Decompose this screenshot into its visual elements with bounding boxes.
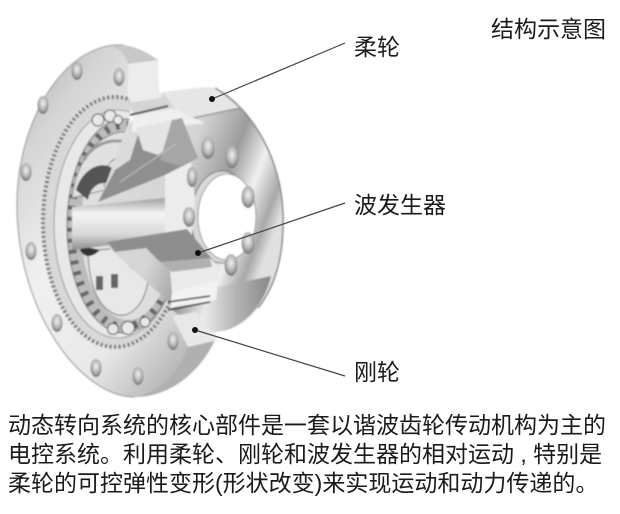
diagram: harmonic drive cutaway	[16, 42, 346, 398]
upper section: wave generator and flexspline	[98, 97, 205, 202]
leader: wave generator	[195, 203, 345, 256]
toothed ring and bearing cavity	[42, 96, 188, 348]
upper nested races	[72, 132, 132, 198]
leader: flexspline	[209, 43, 345, 102]
output shaft	[72, 198, 172, 250]
description text: 电控系统。利用柔轮、刚轮和波发生器的相对运动 , 特别是	[8, 441, 602, 467]
label: circular spline: 刚轮	[354, 359, 400, 385]
bearing balls	[92, 110, 150, 334]
description text: 动态转向系统的核心部件是一套以谐波齿轮传动机构为主的	[8, 412, 606, 438]
front bolts	[20, 62, 178, 385]
leader: circular spline	[192, 327, 345, 376]
description text	[8, 412, 606, 496]
title: 结构示意图	[491, 16, 606, 42]
lower section: wave generator and flexspline	[107, 229, 220, 310]
lower nested races	[88, 248, 149, 315]
rear flange	[100, 87, 283, 332]
rear bolts	[202, 137, 254, 276]
inner bright face behind shaft	[165, 162, 195, 245]
front flange	[17, 45, 218, 397]
label: wave generator: 波发生器	[354, 192, 446, 218]
label: flexspline: 柔轮	[354, 34, 400, 60]
description text: 柔轮的可控弹性变形(形状改变)来实现运动和动力传递的。	[8, 470, 598, 496]
inner bolts	[183, 167, 197, 227]
centre hole	[191, 171, 253, 263]
